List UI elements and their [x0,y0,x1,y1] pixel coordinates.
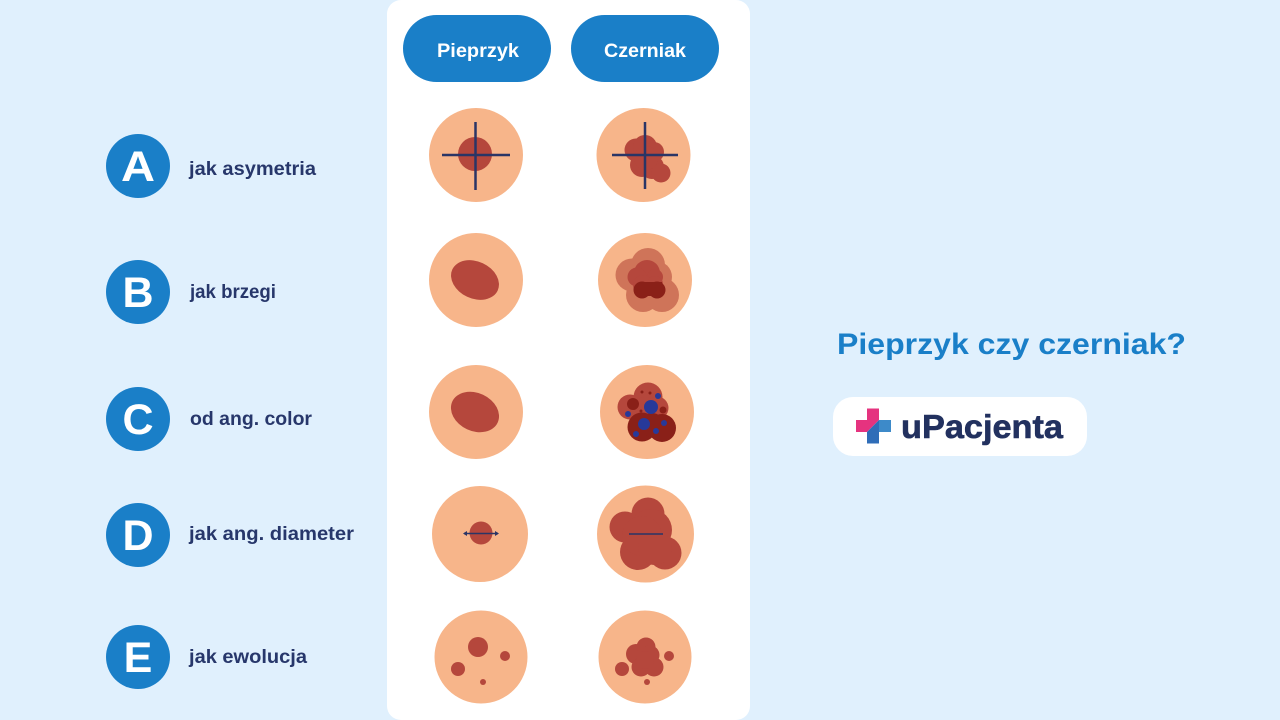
melanoma E: evolving spots [598,610,692,704]
row C: letter badge and label: od ang. color [190,409,313,430]
melanoma A: asymmetric with axes [596,108,690,202]
mole A: symmetric with axes [429,108,523,202]
row B: letter badge and label: B [122,269,154,317]
row A: letter badge and label: jak asymetria [188,159,316,180]
row E: letter badge and label [106,625,307,689]
row E: letter badge and label: E [124,634,152,682]
mole C: single colour [429,365,523,459]
row A: letter badge and label [106,134,316,198]
row E: letter badge and label: jak ewolucja [188,647,307,668]
melanoma B: irregular border [598,233,692,327]
melanoma D: large diameter [597,486,694,582]
button: Czerniak [571,15,719,82]
button: Czerniak: Czerniak [604,41,686,62]
row C: letter badge and label: C [122,396,154,444]
row A: letter badge and label: A [121,143,155,191]
row B: letter badge and label: jak brzegi [189,282,276,303]
button: Pieprzyk: Pieprzyk [437,41,519,62]
mole E: stable spots [434,610,528,704]
row D: letter badge and label [106,503,355,567]
logo: uPacjenta [833,397,1087,456]
button: Pieprzyk [403,15,551,82]
row D: letter badge and label: D [122,512,154,560]
row C: letter badge and label [106,387,313,451]
row D: letter badge and label: jak ang. diameter [188,524,355,545]
logo: uPacjenta: uPacjenta [901,408,1064,445]
icon: medical cross [856,408,891,444]
title: Pieprzyk czy czerniak? [837,328,1186,361]
panel: comparison column [387,0,750,720]
mole D: small diameter [432,486,528,582]
mole B: even border [429,233,523,327]
row B: letter badge and label [106,260,276,324]
melanoma C: multiple colours [600,365,694,459]
